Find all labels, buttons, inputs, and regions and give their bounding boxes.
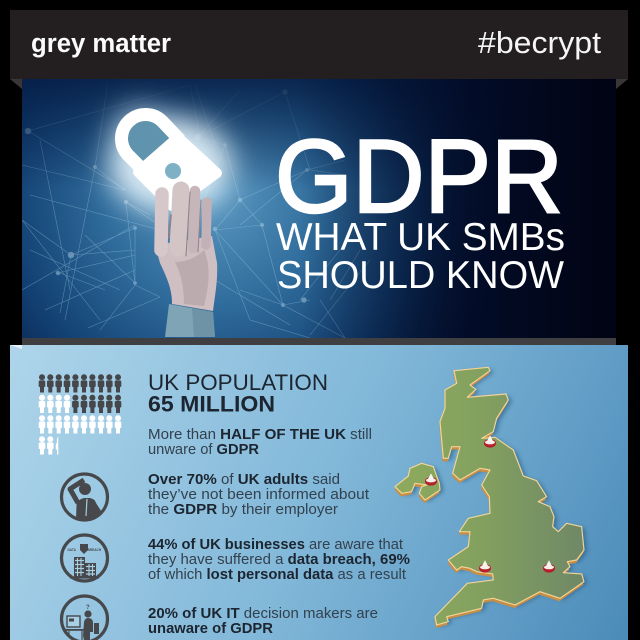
- map marker: London: [543, 560, 555, 573]
- icon: glowing padlock: [122, 115, 217, 206]
- text: 44 percent of businesses: they have suffered a data breach, 69%: [148, 552, 410, 568]
- pictogram: population people: [39, 374, 121, 454]
- text: 20 percent of IT decision makers: [148, 606, 378, 637]
- text: 70 percent of adults: Over 70% of UK adults said: [148, 472, 340, 488]
- map marker: Belfast: [425, 473, 437, 486]
- icon: confused employee: [62, 474, 108, 520]
- text: 44 percent of businesses: 44% of UK businesses are aware that: [148, 537, 403, 553]
- icon: raised hand: [155, 190, 217, 337]
- subtitle line 2: SHOULD KNOW: [277, 254, 564, 297]
- padlock glow: [108, 105, 232, 213]
- heading: 65 million: 65 MILLION: [148, 392, 275, 416]
- icon: data breach building: DATA: [68, 548, 77, 552]
- text: half of the UK: More than HALF OF THE UK still: [148, 427, 372, 443]
- map marker: Cardiff: [479, 560, 491, 573]
- map: United Kingdom: [394, 367, 587, 628]
- network lines: [22, 82, 370, 338]
- text: half of the UK: unware of GDPR: [148, 442, 259, 458]
- text: half of the UK: [148, 427, 372, 458]
- text: 20 percent of IT decision makers: 20% of UK IT decision makers are: [148, 606, 378, 622]
- panel: UK statistics: [10, 345, 628, 640]
- map shadow: [398, 369, 587, 627]
- title: GDPR: GDPR: [275, 119, 563, 235]
- icon: data breach building: BREACH: [88, 548, 102, 552]
- text: 44 percent of businesses: [148, 537, 410, 583]
- text: 44 percent of businesses: of which lost personal data as a result: [148, 567, 406, 583]
- hashtag: becrypt: #becrypt: [478, 25, 601, 60]
- header bar: [10, 10, 628, 89]
- text: 70 percent of adults: [148, 472, 369, 518]
- map land surface: [395, 367, 584, 625]
- map marker: Edinburgh: [484, 435, 496, 448]
- subtitle line 1: WHAT UK SMBs: [276, 216, 565, 259]
- text: 20 percent of IT decision makers: unaware of GDPR: [148, 621, 273, 637]
- text: 70 percent of adults: the GDPR by their employer: [148, 502, 338, 518]
- hero banner: [22, 79, 616, 338]
- icon: data breach building: [62, 535, 108, 581]
- text: 70 percent of adults: they’ve not been informed about: [148, 487, 369, 503]
- brand: grey matter: grey matter: [31, 30, 171, 58]
- map land edge: [394, 370, 583, 628]
- icon: unaware IT decision maker: ?: [86, 605, 90, 611]
- icon: unaware IT decision maker: [62, 596, 108, 640]
- heading: UK population: UK POPULATION: [148, 370, 328, 395]
